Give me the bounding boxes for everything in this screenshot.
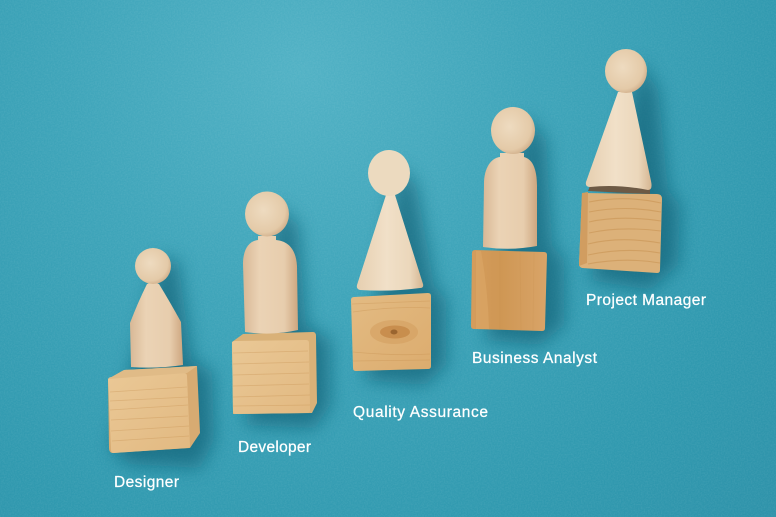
figure: Project Manager (579, 49, 680, 290)
label: Developer: Developer (238, 439, 311, 456)
label: Business Analyst: Business Analyst (472, 350, 598, 367)
figure: Quality Assurance (351, 150, 446, 385)
figure: Business Analyst (471, 107, 564, 345)
label: Quality Assurance: Quality Assurance (353, 404, 488, 421)
figure: Designer (108, 248, 214, 468)
label: Project Manager: Project Manager (586, 292, 706, 309)
label: Designer: Designer (114, 474, 179, 491)
figure: Developer (232, 192, 330, 428)
